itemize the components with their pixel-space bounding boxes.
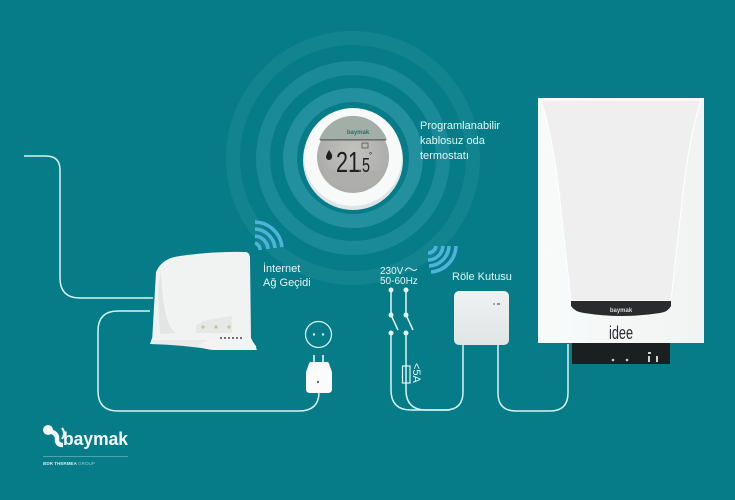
logo squirrel [43,425,64,445]
icon: power plug [306,355,332,393]
fuse [402,366,410,383]
AC symbol [405,268,417,271]
gateway label: Ağ Geçidi [263,277,311,289]
thermostat label: Programlanabilir [420,120,500,132]
logo [43,425,129,466]
logo wordmark: baymak [63,429,129,449]
flame icon [326,150,332,160]
relay label: Röle Kutusu [452,271,512,283]
thermostat temperature: .5 [358,155,370,177]
logo tagline: BDR THERMEA GROUP [43,461,95,466]
thermostat [303,108,403,210]
fuse rating label: <5A [410,363,422,384]
voltage label: 230V [380,266,404,277]
boiler brand: baymak [610,308,633,314]
gateway device [150,252,257,350]
wiring lines [24,156,568,411]
relay box [454,291,509,345]
wifi icon: gateway [255,222,282,250]
thermostat brand: baymak [347,130,370,136]
thermostat label: termostatı [420,150,469,162]
boiler [538,98,704,364]
frequency label: 50-60Hz [380,276,418,287]
thermostat temperature: 21 [336,147,360,179]
boiler model: idee [609,323,633,343]
switches [388,288,413,336]
thermostat label: kablosuz oda [420,135,486,147]
wifi icon: relay [428,246,456,272]
icon: wall socket [306,322,332,348]
gateway label: İnternet [263,262,300,275]
degree symbol: ° [369,151,372,160]
schedule icon [362,143,368,148]
signal rings [233,38,473,278]
